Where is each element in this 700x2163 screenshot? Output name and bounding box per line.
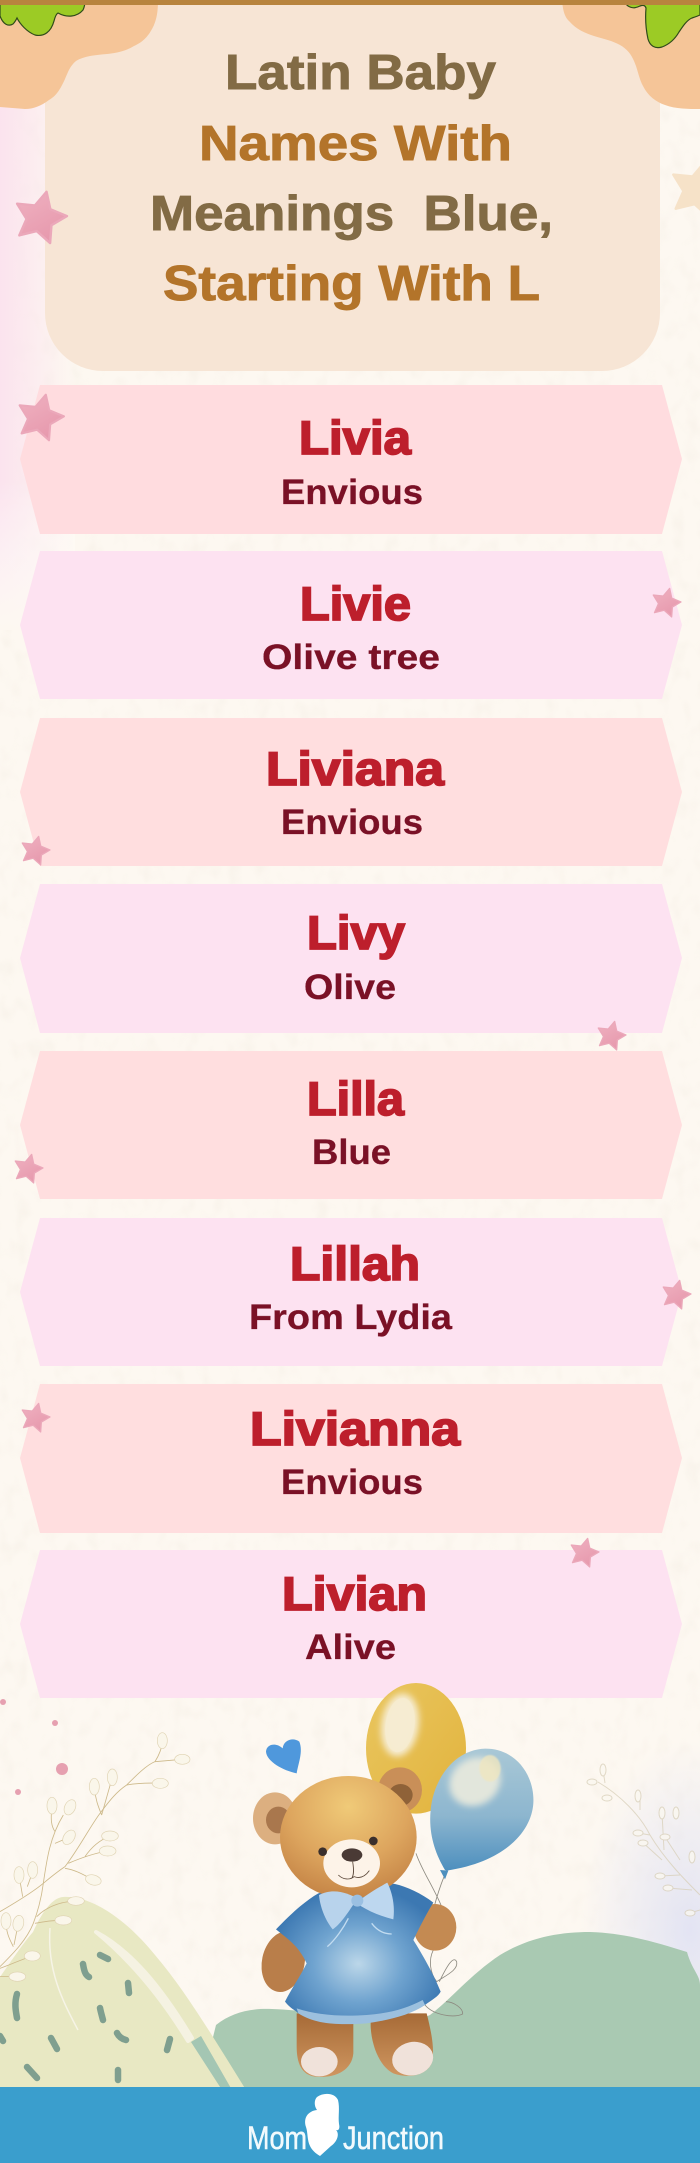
banner: Liviana	[20, 718, 682, 866]
leaves top left	[0, 0, 85, 35]
banner: Livy: Livy	[307, 906, 405, 959]
left branch	[0, 1733, 190, 1981]
title: Meanings Blue,	[150, 187, 553, 241]
left hill	[0, 1897, 246, 2090]
blue heart	[266, 1739, 301, 1773]
banner: Livia: Envious	[281, 473, 423, 512]
blue balloon	[430, 1747, 533, 1879]
banner: Lilla: Blue	[312, 1133, 391, 1172]
banner: Livian: Alive	[305, 1628, 396, 1667]
teddy bear with balloons	[253, 1683, 533, 2079]
banner: Livian	[20, 1550, 682, 1698]
banner: Livie: Livie	[300, 577, 411, 630]
bear arms	[256, 1904, 456, 1996]
MomJunction logo	[247, 2094, 444, 2156]
top edge bar	[0, 0, 700, 5]
banner: Livy: Olive	[304, 968, 396, 1007]
stars	[10, 155, 700, 1568]
banner: Livie	[20, 551, 682, 699]
corner blob left	[0, 0, 158, 109]
white brush stroke on hill	[96, 1932, 192, 2041]
banner: Livian: Livian	[282, 1567, 427, 1620]
leaves top right	[623, 0, 700, 48]
MomJunction logo: Junction	[343, 2120, 444, 2156]
banner: Livia	[20, 385, 682, 534]
title panel	[45, 0, 660, 371]
MomJunction logo: Mom	[247, 2120, 307, 2156]
banner: Livianna	[20, 1384, 682, 1533]
banner: Livia: Livia	[299, 411, 412, 464]
pink dots	[0, 1699, 68, 1795]
banner: Livy	[20, 884, 682, 1033]
banner: Livianna: Livianna	[250, 1402, 461, 1455]
bear ears	[253, 1767, 422, 1844]
blue dress	[276, 1883, 441, 2024]
corner blob right	[562, 0, 700, 109]
balloon strings	[416, 1853, 463, 2016]
green hill	[200, 1932, 700, 2090]
title: Starting With L	[163, 257, 540, 311]
bear legs	[297, 2013, 436, 2079]
yellow balloon	[366, 1683, 466, 1814]
bear face	[318, 1837, 380, 1887]
banner: Lilla	[20, 1051, 682, 1199]
banner: Lilla: Lilla	[307, 1072, 405, 1125]
hill dashes	[0, 1955, 170, 2080]
banner: Lillah: From Lydia	[249, 1298, 453, 1337]
bow tie	[319, 1883, 394, 1929]
title	[150, 46, 553, 311]
banner: Livie: Olive tree	[262, 638, 440, 677]
title: Names With	[199, 117, 512, 171]
banner: Lillah: Lillah	[290, 1237, 420, 1290]
banner: Liviana: Envious	[281, 803, 423, 842]
logo silhouette	[305, 2094, 339, 2156]
bear head	[280, 1776, 417, 1899]
teal stripe on hill	[191, 2036, 232, 2090]
title: Latin Baby	[225, 46, 496, 100]
banner: Liviana: Liviana	[266, 742, 445, 795]
footer bar	[0, 2087, 700, 2163]
banner: Livianna: Envious	[281, 1463, 423, 1502]
banner: Lillah	[20, 1218, 682, 1366]
right branch	[587, 1764, 700, 1916]
